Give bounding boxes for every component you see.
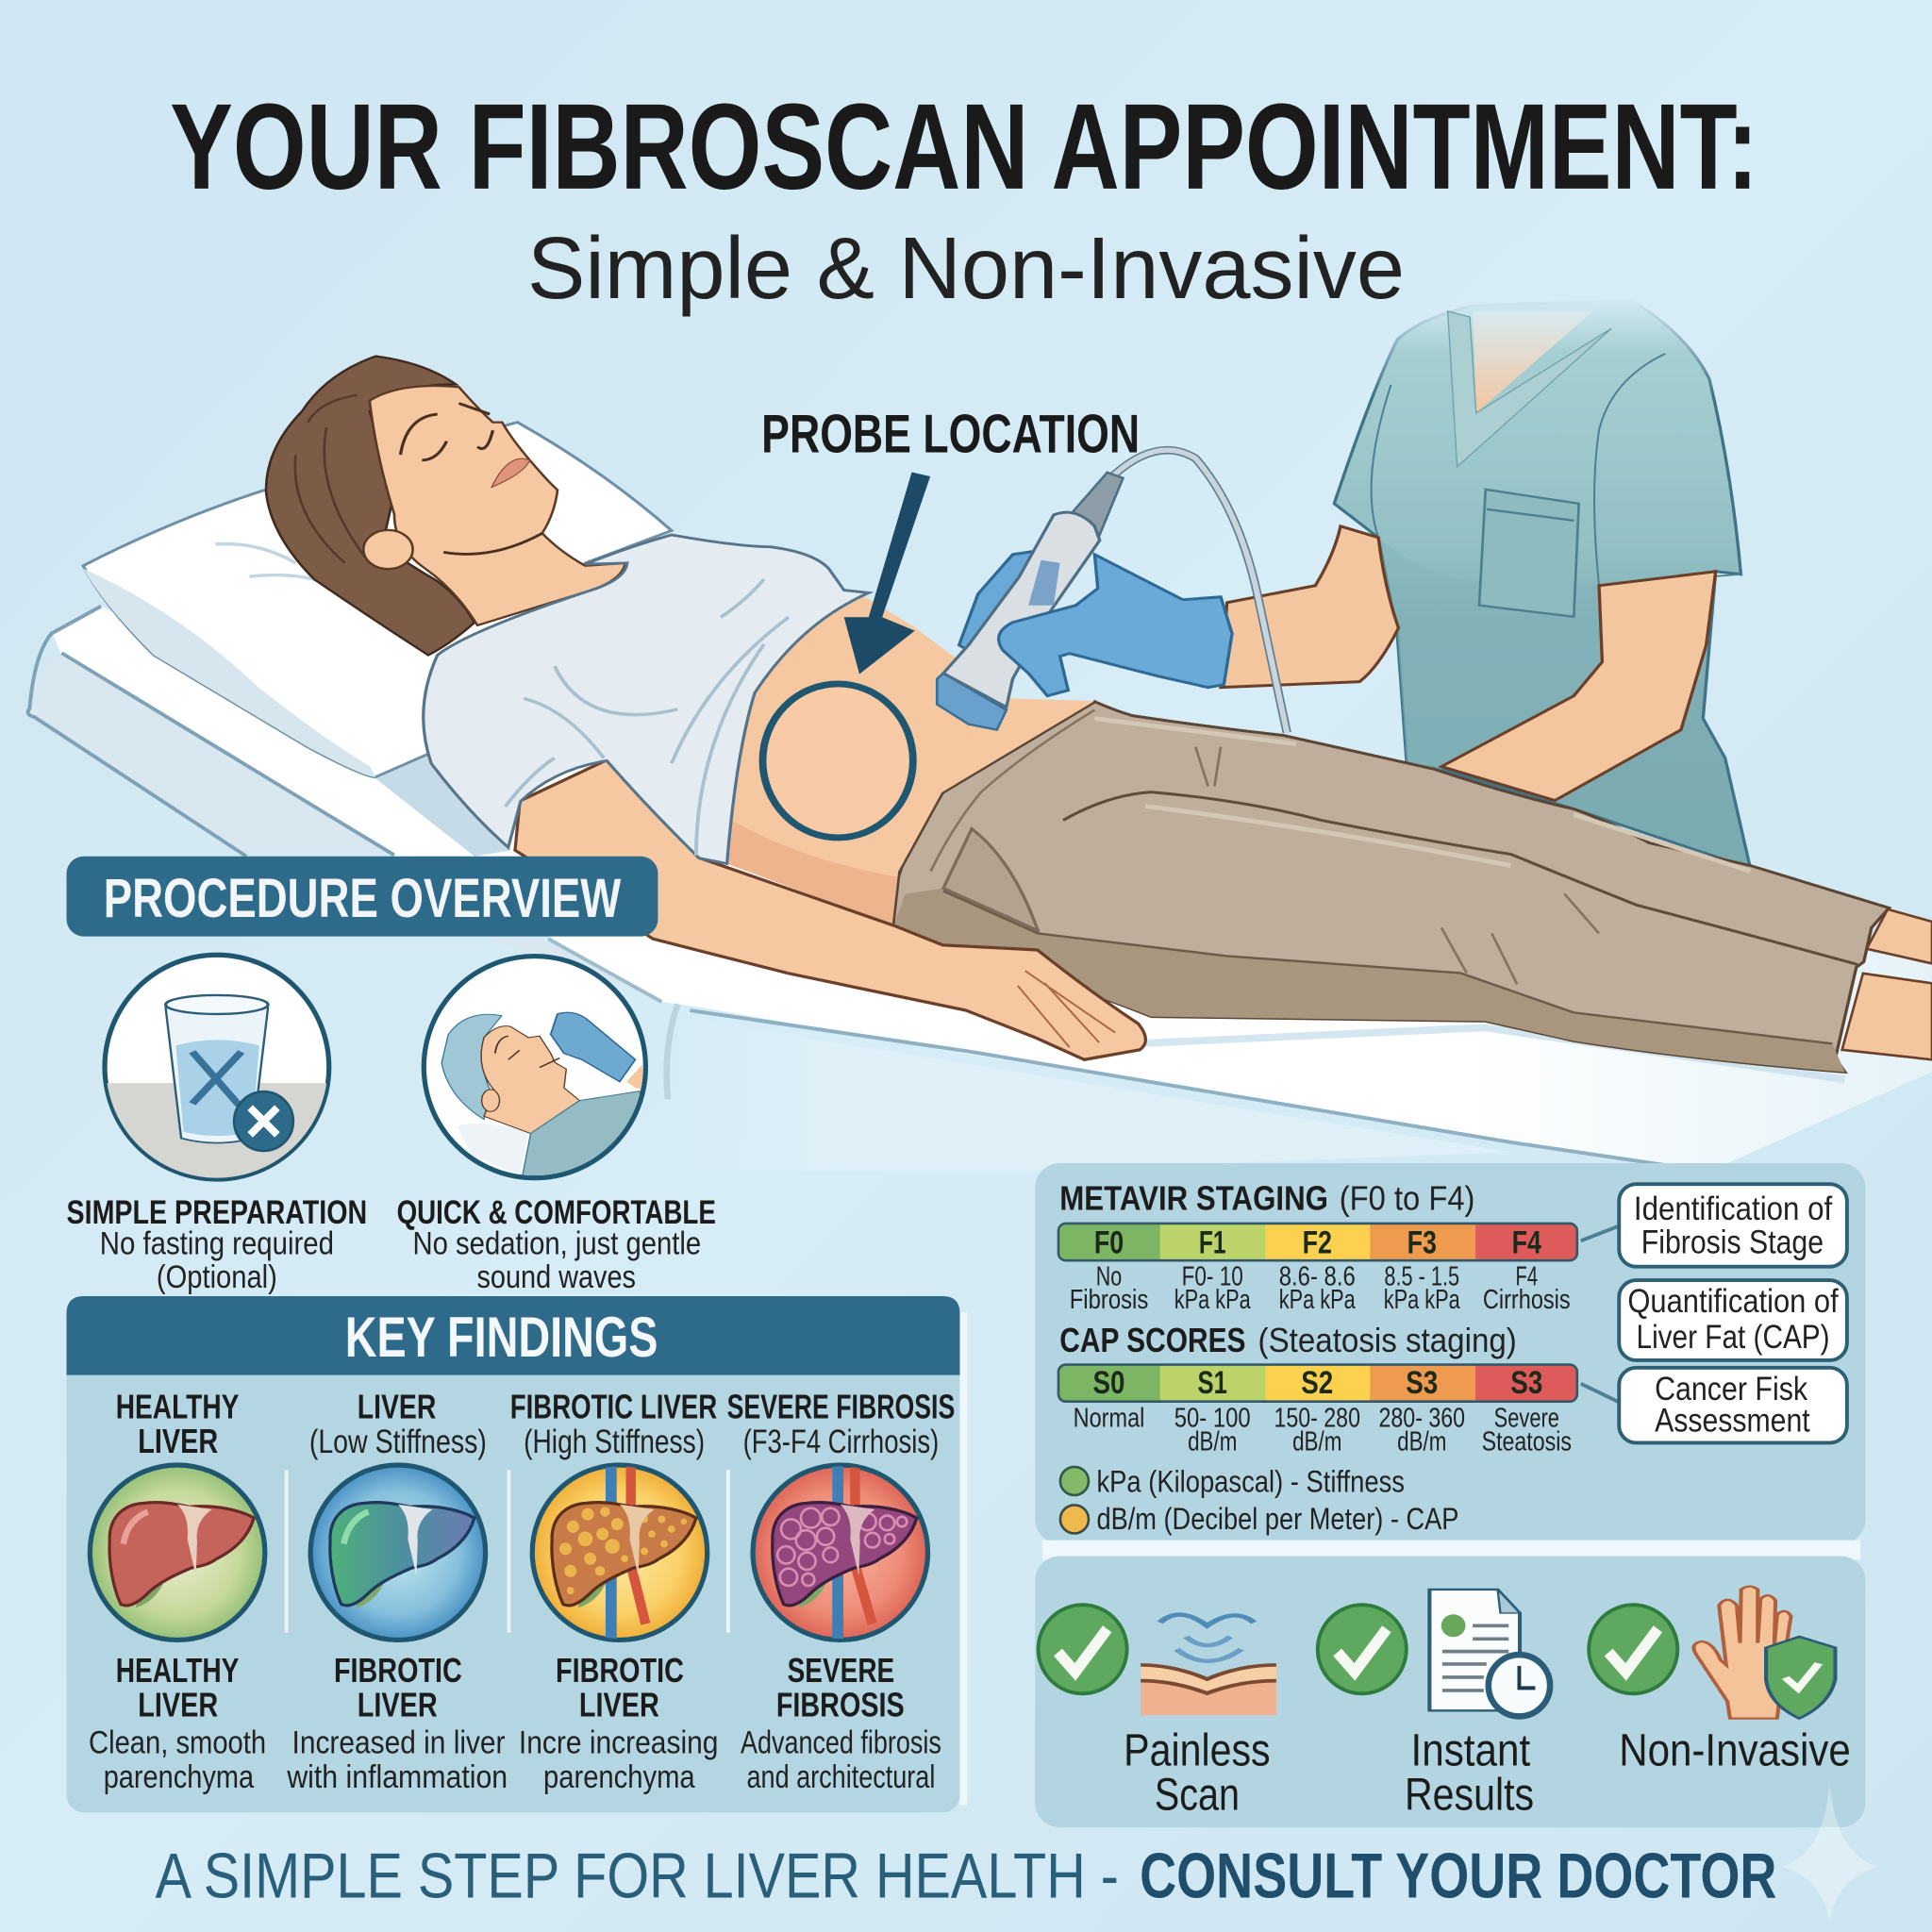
icon: hand and shield <box>1693 1587 1835 1719</box>
probe cable <box>1113 450 1287 733</box>
column: low stiffness liver: LIVER <box>358 1387 436 1425</box>
nurse scrubs <box>1334 300 1750 869</box>
bar: metavir stages: F0 <box>1094 1224 1124 1260</box>
labels: cap ranges: dB/m <box>1397 1426 1446 1457</box>
bar: cap scores: S1 <box>1198 1365 1227 1401</box>
illustration: patient exam scene <box>28 300 1932 1171</box>
icon: liver low stiffness <box>310 1465 486 1640</box>
benefit: painless scan: Scan <box>1155 1770 1240 1821</box>
column: severe fibrosis <box>727 1387 955 1795</box>
column: severe fibrosis: SEVERE <box>788 1651 894 1690</box>
labels: cap ranges <box>1074 1403 1572 1457</box>
text: quick and comfortable: QUICK & COMFORTABLE <box>397 1194 716 1231</box>
hair <box>266 357 475 655</box>
location ring <box>762 684 913 838</box>
probe head <box>937 674 1007 730</box>
column: low stiffness liver <box>286 1387 508 1795</box>
labels: metavir ranges: 8.5 - 1.5 <box>1384 1261 1459 1291</box>
patient calves <box>1842 909 1932 1059</box>
trouser pocket <box>943 829 1038 930</box>
icon: severe fibrosis liver <box>753 1465 928 1640</box>
bar: metavir stages: F4 <box>1512 1224 1541 1260</box>
callout: quantification of liver fat <box>1619 1280 1847 1360</box>
heading: cap scores: (Steatosis staging) <box>1258 1321 1517 1359</box>
callout: quantification of liver fat: Liver Fat (CAP) <box>1637 1319 1830 1356</box>
patient abdomen <box>727 595 1096 925</box>
benefit: painless scan <box>1039 1605 1276 1821</box>
column: low stiffness liver: LIVER <box>358 1685 438 1724</box>
panel: key findings <box>67 1296 963 1812</box>
arrow: probe location <box>844 472 930 675</box>
icon: glass of water with cross <box>105 955 329 1183</box>
icon: relaxed patient <box>424 957 649 1179</box>
heading: key findings <box>67 1296 959 1375</box>
column: severe fibrosis: FIBROSIS <box>776 1685 905 1724</box>
ear <box>363 530 413 569</box>
callout: cancer risk assessment: Cancer Fisk <box>1655 1371 1807 1407</box>
text: simple preparation: (Optional) <box>157 1259 277 1295</box>
column: fibrotic liver: Incre increasing <box>519 1725 718 1761</box>
callout: quantification of liver fat: Quantification of <box>1627 1283 1839 1320</box>
bar: cap scores <box>1058 1365 1577 1402</box>
labels: cap ranges: 280- 360 <box>1379 1403 1465 1433</box>
patient shirt, head and hair <box>266 357 930 863</box>
heading: metavir staging: (F0 to F4) <box>1340 1179 1474 1218</box>
probe and gloved hand <box>937 473 1232 730</box>
text: simple preparation <box>67 1194 367 1295</box>
subtitle: Simple & Non-Invasive <box>527 219 1405 317</box>
text: quick and comfortable: No sedation, just gentle <box>413 1226 701 1262</box>
labels: metavir ranges: 8.6- 8.6 <box>1279 1261 1356 1291</box>
icon: fibrotic liver <box>532 1465 708 1640</box>
footer message: A SIMPLE STEP FOR LIVER HEALTH - <box>156 1840 1119 1911</box>
column: fibrotic liver: FIBROTIC LIVER <box>510 1387 717 1425</box>
column: healthy liver <box>89 1387 266 1795</box>
nurse arm holding patient <box>1441 572 1716 801</box>
labels: metavir ranges <box>1070 1261 1571 1315</box>
column: low stiffness liver: Increased in liver <box>292 1725 506 1761</box>
patient arm and hand <box>515 760 1145 1059</box>
text: quick and comfortable: sound waves <box>476 1259 636 1295</box>
nurse forearm <box>1221 526 1399 688</box>
heading: cap scores: CAP SCORES <box>1059 1321 1245 1359</box>
column: low stiffness liver: (Low Stiffness) <box>309 1424 487 1460</box>
labels: metavir ranges: No <box>1096 1261 1122 1291</box>
labels: cap ranges: dB/m <box>1292 1426 1341 1457</box>
benefit: instant results <box>1318 1590 1550 1821</box>
procedure overview panel <box>67 857 716 1295</box>
icon: check <box>1318 1605 1407 1693</box>
panel: benefits <box>1035 1541 1865 1827</box>
probe location label: PROBE LOCATION <box>761 404 1140 464</box>
labels: metavir ranges: kPa kPa <box>1279 1285 1356 1315</box>
text: simple preparation: No fasting required <box>100 1226 334 1262</box>
icon: check <box>1039 1605 1127 1693</box>
icon: skin with sound waves <box>1141 1615 1276 1715</box>
exam bed <box>28 607 1932 1171</box>
column: severe fibrosis: and architectural <box>747 1759 935 1795</box>
icon: check <box>1589 1605 1677 1693</box>
pillow <box>83 423 672 777</box>
icon: report and clock <box>1429 1590 1550 1716</box>
column: healthy liver: HEALTHY <box>116 1651 239 1690</box>
labels: metavir ranges: F0- 10 <box>1182 1261 1243 1291</box>
labels: cap ranges: Steatosis <box>1482 1426 1572 1457</box>
scrub pocket <box>1479 490 1579 617</box>
bar: cap scores: S2 <box>1301 1365 1333 1401</box>
bar: cap scores: S0 <box>1093 1365 1124 1401</box>
callout: identification of fibrosis stage: Identification of <box>1634 1191 1832 1227</box>
labels: cap ranges: Severe <box>1494 1403 1559 1433</box>
column: severe fibrosis: (F3-F4 Cirrhosis) <box>743 1424 939 1460</box>
column: healthy liver: Clean, smooth <box>89 1725 266 1761</box>
callout: identification of fibrosis stage <box>1619 1184 1847 1267</box>
benefit: non-invasive: Non-Invasive <box>1619 1725 1851 1776</box>
callout: identification of fibrosis stage: Fibrosis Stage <box>1641 1224 1824 1260</box>
footer message: CONSULT YOUR DOCTOR <box>1140 1840 1776 1911</box>
text: simple preparation: SIMPLE PREPARATION <box>67 1194 367 1231</box>
heading: cap scores <box>1059 1321 1517 1359</box>
labels: cap ranges: 50- 100 <box>1174 1403 1251 1433</box>
labels: cap ranges: Normal <box>1074 1403 1144 1433</box>
column: fibrotic liver: LIVER <box>579 1685 659 1724</box>
labels: cap ranges: 150- 280 <box>1274 1403 1360 1433</box>
benefit: instant results: Results <box>1405 1770 1534 1821</box>
labels: metavir ranges: Fibrosis <box>1070 1285 1148 1315</box>
heading: procedure overview <box>67 857 658 937</box>
column: healthy liver: parenchyma <box>104 1759 254 1795</box>
column: low stiffness liver: with inflammation <box>286 1759 508 1795</box>
bar: cap scores: S3 <box>1406 1365 1438 1401</box>
column: severe fibrosis: Advanced fibrosis <box>741 1725 941 1761</box>
text: quick and comfortable <box>397 1194 716 1295</box>
callout: cancer risk assessment: Assessment <box>1655 1403 1810 1440</box>
heading: metavir staging: METAVIR STAGING <box>1059 1179 1328 1218</box>
heading: key findings: KEY FINDINGS <box>345 1306 658 1369</box>
legend: units: dB/m (Decibel per Meter) - CAP <box>1096 1501 1458 1536</box>
back fingers <box>959 549 1051 651</box>
column: healthy liver: LIVER <box>138 1685 218 1724</box>
labels: metavir ranges: Cirrhosis <box>1483 1285 1571 1315</box>
column: healthy liver: LIVER <box>138 1422 218 1460</box>
bar: metavir stages: F2 <box>1303 1224 1332 1260</box>
column: fibrotic liver <box>510 1387 718 1795</box>
benefit: instant results: Instant <box>1411 1725 1531 1776</box>
nurse neckline <box>1473 311 1592 413</box>
legend: units <box>1060 1464 1458 1536</box>
labels: metavir ranges: kPa kPa <box>1384 1285 1460 1315</box>
nurse <box>1113 300 1750 869</box>
sparkle watermark <box>1782 1783 1878 1923</box>
column: low stiffness liver: FIBROTIC <box>334 1651 462 1690</box>
shirt <box>424 535 869 863</box>
bar: metavir stages: F3 <box>1407 1224 1437 1260</box>
benefit: painless scan: Painless <box>1124 1725 1271 1776</box>
bar: metavir stages <box>1058 1224 1577 1260</box>
patient trousers <box>892 702 1889 1072</box>
bar: metavir stages: F1 <box>1199 1224 1226 1260</box>
labels: metavir ranges: F4 <box>1516 1261 1538 1291</box>
legend: units: kPa (Kilopascal) - Stiffness <box>1096 1464 1405 1499</box>
column: fibrotic liver: FIBROTIC <box>556 1651 684 1690</box>
labels: metavir ranges: kPa kPa <box>1174 1285 1251 1315</box>
callout: cancer risk assessment <box>1619 1368 1847 1442</box>
column: severe fibrosis: SEVERE FIBROSIS <box>727 1387 955 1425</box>
column: healthy liver: HEALTHY <box>116 1387 239 1425</box>
labels: cap ranges: dB/m <box>1188 1426 1237 1457</box>
glove <box>999 555 1232 696</box>
probe handle <box>943 512 1100 708</box>
facial features <box>400 404 542 554</box>
icon: healthy liver <box>90 1465 265 1640</box>
face and neck <box>370 386 625 625</box>
panel: staging scales <box>1035 1163 1865 1544</box>
benefit: non-invasive <box>1589 1587 1851 1776</box>
column: fibrotic liver: parenchyma <box>543 1759 695 1795</box>
column: fibrotic liver: (High Stiffness) <box>524 1424 705 1460</box>
heading: procedure overview: PROCEDURE OVERVIEW <box>104 868 622 929</box>
probe neck <box>1073 473 1123 535</box>
bar: cap scores: S3 <box>1510 1365 1542 1401</box>
